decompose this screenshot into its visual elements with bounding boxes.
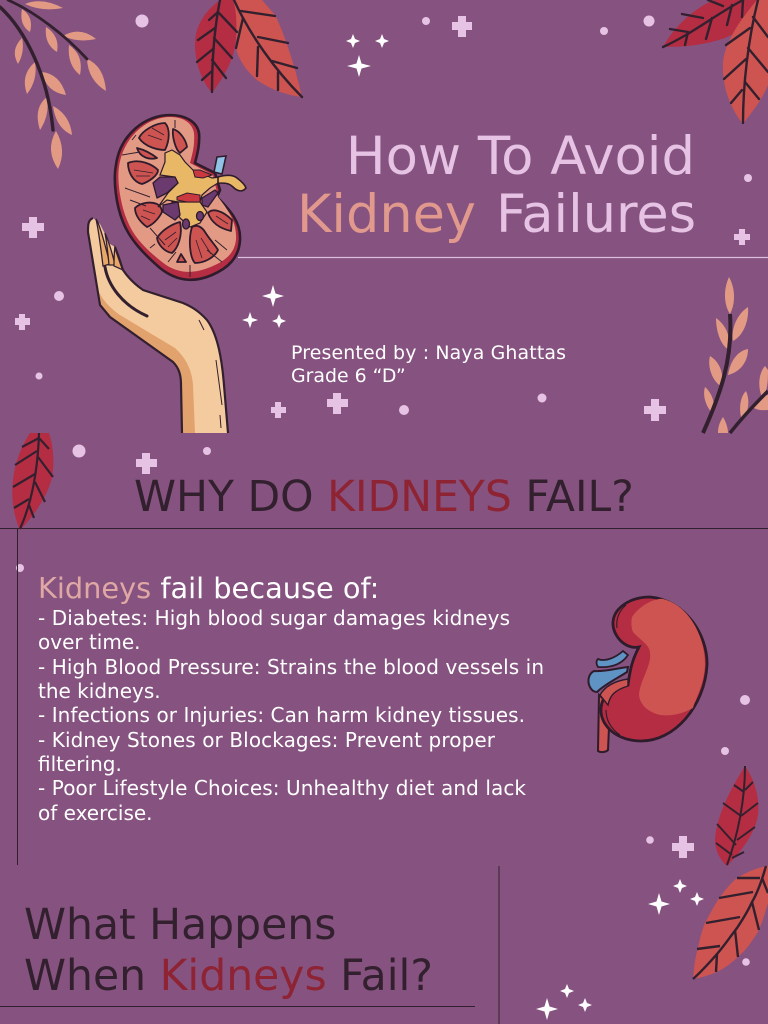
sparkles near hand <box>242 285 286 328</box>
sparkles near bottom right leaf <box>648 879 704 915</box>
subheading: kidneys fail because of: Kidneys fail because of: <box>38 571 379 605</box>
icon: red leaf bottom right <box>693 866 768 979</box>
body text: list of causes: filtering. <box>38 752 122 776</box>
icon: crimson leaf left <box>12 433 53 530</box>
icon: red leaves top right <box>663 0 768 124</box>
icon: hand <box>88 218 228 433</box>
icon: kidney <box>588 597 707 752</box>
heading: what happens when kidneys fail: When Kidneys Fail? <box>24 952 433 1001</box>
title <box>297 126 696 245</box>
body text: list of causes <box>38 606 544 825</box>
icon: crimson leaf right <box>715 766 758 866</box>
body text: list of causes: - Infections or Injuries: Can harm kidney tissues. <box>38 703 525 727</box>
sparkles bottom <box>536 984 592 1020</box>
presenter text: Presented by : Naya Ghattas <box>291 342 566 364</box>
presenter text: Grade 6 “D” <box>291 365 406 387</box>
title: How To Avoid <box>346 126 695 187</box>
heading: what happens when kidneys fail: What Happens <box>24 901 336 950</box>
presenter text <box>291 342 566 387</box>
icon: red leaves top centre <box>195 0 302 97</box>
body text: list of causes: over time. <box>38 630 140 654</box>
body text: list of causes: - Poor Lifestyle Choices: Unhealthy diet and lack <box>38 776 526 800</box>
sparkles near title <box>346 34 389 77</box>
body text: list of causes: - Kidney Stones or Blockages: Prevent proper <box>38 728 496 752</box>
heading: why do kidneys fail: WHY DO KIDNEYS FAIL? <box>134 473 634 522</box>
title: Failures <box>496 184 696 245</box>
body text: list of causes: of exercise. <box>38 801 153 825</box>
body text: list of causes: - Diabetes: High blood sugar damages kidneys <box>38 606 510 630</box>
heading: what happens when kidneys fail <box>24 901 433 1001</box>
body text: list of causes: the kidneys. <box>38 679 161 703</box>
icon: kidney cross-section <box>115 115 246 280</box>
title: Kidney <box>297 184 476 245</box>
body text: list of causes: - High Blood Pressure: Strains the blood vessels in <box>38 655 544 679</box>
icon: peach branch top left <box>0 0 106 169</box>
icon: peach branch right <box>703 277 768 433</box>
